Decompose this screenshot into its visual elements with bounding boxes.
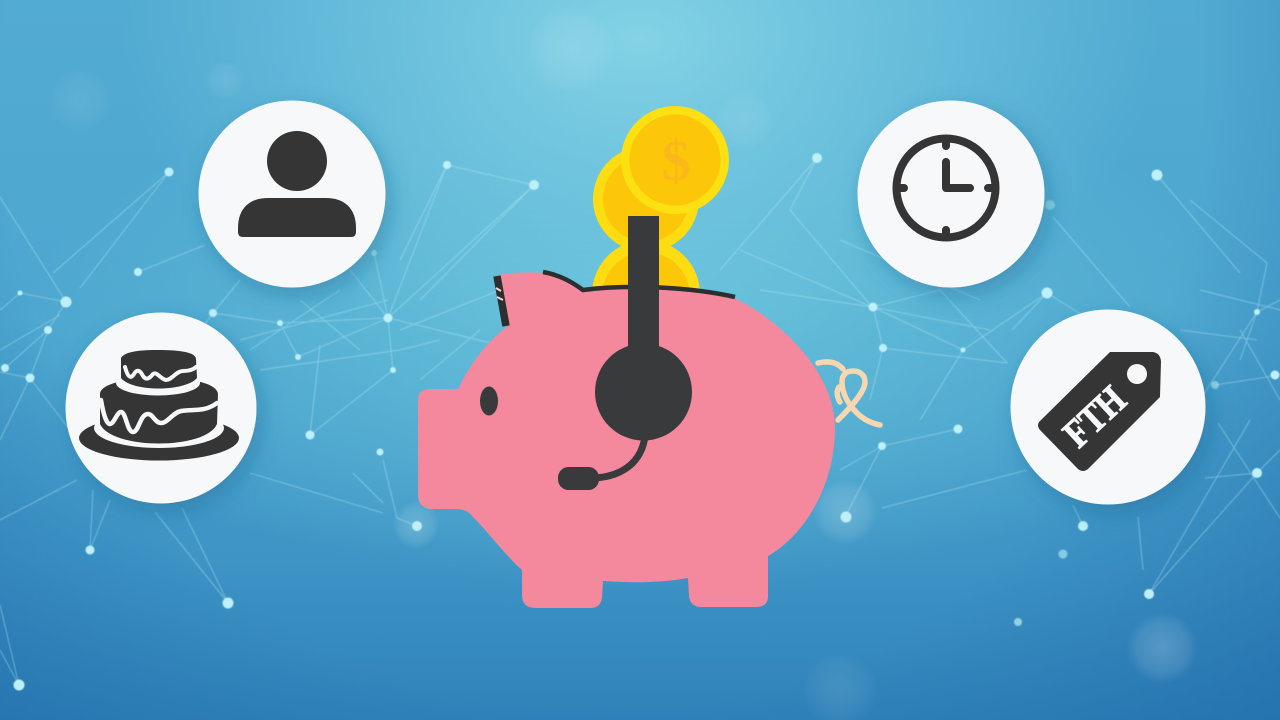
pig tail — [818, 362, 880, 425]
pig back line — [543, 272, 735, 297]
piggy bank — [418, 272, 835, 608]
microphone — [558, 467, 599, 490]
headband — [628, 216, 659, 366]
coin: middle — [593, 146, 699, 252]
pig body — [418, 272, 835, 608]
earpiece — [595, 344, 692, 440]
coin: top with dollar sign — [621, 106, 729, 214]
coin: bottom — [592, 240, 700, 348]
headset — [558, 216, 692, 490]
pig eye — [480, 386, 498, 416]
icon badge: price tag — [1010, 310, 1206, 504]
icon badge: clock — [858, 100, 1044, 288]
pig ear mark — [496, 276, 506, 326]
tag label: FTH — [1054, 377, 1135, 456]
microphone arm — [595, 436, 645, 478]
icon badge: cake — [66, 312, 256, 504]
icon badge: person — [198, 100, 386, 288]
coin: top with dollar sign: $ — [662, 128, 690, 193]
network pattern — [0, 153, 1280, 690]
coins — [592, 106, 729, 348]
